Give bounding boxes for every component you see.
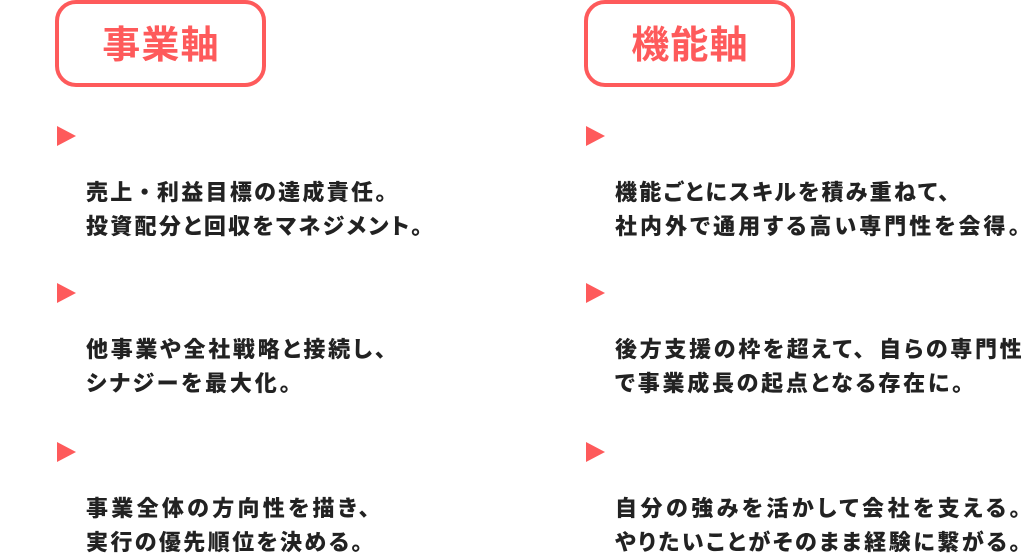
heading: function axis: 機能軸: [631, 25, 749, 67]
text: function point 3: やりたいことがそのまま経験に繋がる。: [615, 530, 1023, 555]
text: function point 1: 機能ごとにスキルを積み重ねて、: [615, 180, 952, 205]
text: function point 2: で事業成長の起点となる存在に。: [615, 371, 966, 396]
heading: function axis: [584, 0, 794, 87]
text: function point 1: [615, 180, 1023, 239]
text: function point 2: [615, 337, 1024, 396]
text: business point 2: シナジーを最大化。: [86, 371, 293, 396]
icon: triangle marker function 3: [586, 442, 605, 462]
icon: triangle marker function 2: [586, 283, 605, 303]
heading: business axis: 事業軸: [102, 25, 220, 67]
text: business point 1: [86, 180, 424, 239]
icon: triangle marker business 3: [57, 442, 76, 462]
heading: business axis: [54, 0, 266, 87]
text: business point 3: 事業全体の方向性を描き、: [86, 496, 373, 521]
text: function point 1: 社内外で通用する高い専門性を会得。: [615, 214, 1023, 239]
icon: triangle marker business 1: [57, 126, 76, 146]
text: business point 2: 他事業や全社戦略と接続し、: [86, 337, 388, 362]
icon: triangle marker business 2: [57, 283, 76, 303]
text: business point 3: [86, 496, 373, 555]
text: business point 3: 実行の優先順位を決める。: [86, 530, 365, 555]
text: function point 2: 後方支援の枠を超えて、 自らの専門性: [615, 337, 1024, 362]
text: business point 2: [86, 337, 388, 396]
text: function point 3: [615, 496, 1024, 555]
text: business point 1: 投資配分と回収をマネジメント。: [86, 214, 424, 239]
text: business point 1: 売上・利益目標の達成責任。: [86, 180, 389, 205]
text: function point 3: 自分の強みを活かして会社を支える。: [615, 496, 1024, 521]
icon: triangle marker function 1: [586, 126, 605, 146]
